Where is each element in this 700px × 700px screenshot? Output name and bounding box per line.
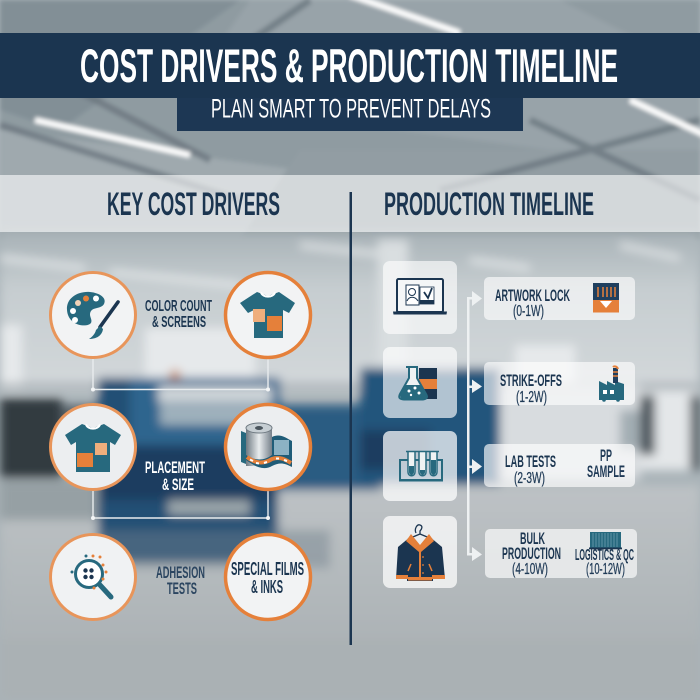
label: adhesion tests: TESTS [167,579,197,598]
text: LOGISTICS & QC [575,547,634,564]
step: lab tests and pp sample [484,444,635,487]
icon card: test tubes [383,431,457,501]
section heading band [0,175,700,232]
icon card: jacket on hanger [383,516,457,588]
step: artwork lock: (0-1W) [513,303,544,320]
panel: key cost drivers [50,272,310,620]
step: bulk production and logistics: PRODUCTION [502,544,561,563]
icon: palette and brush [50,272,136,358]
icon: magnifier over dots [50,534,136,620]
step: lab tests and pp sample: SAMPLE [587,462,625,481]
connector: top row [91,358,270,392]
icon: t-shirt placement [50,404,136,490]
label: placement and size: PLACEMENT [145,458,205,477]
icon: artwork file download [593,283,619,312]
label: placement and size: & SIZE [162,475,194,494]
badge: special films and inks: & INKS [251,577,283,597]
panel: production timeline [383,261,637,588]
icon: t-shirt with patches [226,272,310,358]
step: strike-offs [484,362,635,406]
step: bulk production and logistics: (4-10W) [512,561,548,578]
step: lab tests and pp sample: (2-3W) [514,470,545,487]
step: lab tests and pp sample: PP [600,446,612,465]
label: adhesion tests [156,563,205,598]
label: color count and screens [145,298,212,331]
icon: shipping container [589,532,622,549]
label: color count and screens: COLOR COUNT [145,298,212,315]
badge: special films and inks: SPECIAL FILMS [231,559,304,579]
step: strike-offs: (1-2W) [516,389,547,406]
step: artwork lock [484,277,635,320]
step: bulk production and logistics: (10-12W) [586,561,625,578]
icon card: flask and swatch [383,347,457,418]
timeline spine and arrows [467,291,482,561]
icon: film roll [226,404,310,490]
step: lab tests and pp sample: LAB TESTS [505,452,556,471]
label: placement and size [145,458,205,494]
step: artwork lock: ARTWORK LOCK [495,287,570,305]
step: bulk production and logistics: BULK [520,529,545,548]
step: strike-offs: STRIKE-OFFS [500,372,562,390]
step: bulk production and logistics [485,529,637,578]
icon card: laptop artwork [383,261,457,334]
icon: factory [599,366,624,402]
label: adhesion tests: ADHESION [156,563,205,582]
heading: key cost drivers: KEY COST DRIVERS [107,186,280,222]
connector: middle row [91,490,270,520]
badge: special films and inks [226,534,310,620]
subtitle ribbon: PLAN SMART TO PREVENT DELAYS [211,94,491,124]
center divider [350,192,352,645]
label: color count and screens: & SCREENS [152,314,206,331]
subtitle ribbon [177,94,523,131]
